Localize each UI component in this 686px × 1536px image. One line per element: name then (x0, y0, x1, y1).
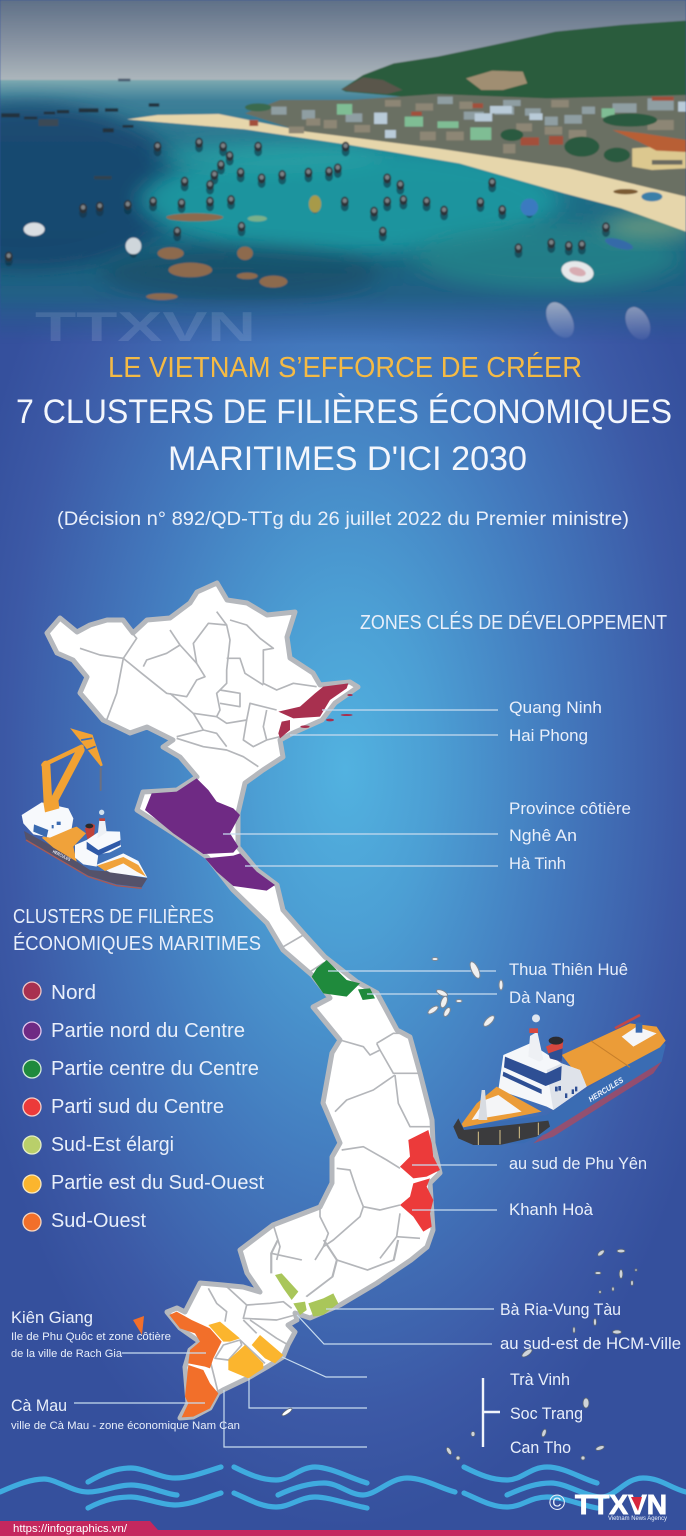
hull (24, 831, 147, 887)
label: Ca Mau: Cà Mau (11, 1396, 67, 1415)
hull name: HERCULES (587, 1075, 626, 1104)
ribbon (0, 1521, 686, 1536)
label: Soc Trang: Soc Trang (510, 1404, 583, 1423)
stern block (622, 1027, 657, 1047)
legend: Nord (23, 982, 96, 1004)
region: Nghe An and Ha Tinh (north-centre cluster) (145, 778, 275, 891)
logo tagline: Vietnam News Agency (608, 1516, 667, 1522)
province borders: Mekong delta (208, 1287, 295, 1393)
legend heading line 1: CLUSTERS DE FILIÈRES (13, 905, 214, 928)
label: Quang Ninh: Quang Ninh (509, 698, 602, 717)
legend: Partie est du Sud-Ouest: Partie est du Sud-Ouest (51, 1172, 264, 1194)
subtitle: decision reference: (Décision n° 892/QD-TTg du 26 juillet 2022 du Premier ministre) (57, 509, 629, 530)
region: Phu Quoc island (133, 1316, 144, 1335)
legend: Parti sud du Centre: Parti sud du Centre (51, 1096, 224, 1118)
label: Khanh Hoa: Khanh Hoà (509, 1200, 594, 1219)
province borders: north (80, 612, 317, 767)
label: Tra Vinh: Trà Vinh (510, 1370, 570, 1389)
label: Province cotiere: Province côtière (509, 799, 631, 818)
cargo deck (42, 827, 86, 862)
label: Phu Quoc line 1: Ile de Phu Quôc et zone côtière (11, 1331, 171, 1343)
label: Phu Quoc line 2: de la ville de Rach Gia (11, 1348, 123, 1360)
legend heading (13, 905, 261, 955)
region: southwest cluster (169, 1312, 222, 1417)
footer ribbon with URL (0, 1521, 686, 1536)
legend: Sud-Est elargi: Sud-Est élargi (51, 1134, 174, 1156)
aft block (22, 802, 73, 838)
label: southeast of HCM-Ville: au sud-est de HCM-Ville (500, 1334, 681, 1353)
islands: Paracel (427, 958, 503, 1028)
illustration: ship with crane (22, 730, 147, 888)
legend: Nord: Nord (51, 982, 96, 1004)
waves (0, 1467, 686, 1508)
label: Kien Giang: Kiên Giang (11, 1308, 93, 1327)
province labels: right column (500, 698, 681, 1457)
funnel (85, 823, 95, 839)
funnel (546, 1038, 563, 1062)
legend: Partie nord du Centre: Partie nord du Centre (51, 1020, 245, 1042)
illustration: Hercules ship (453, 1014, 666, 1145)
title: white line 2: MARITIMES D'ICI 2030 (168, 440, 527, 478)
islands: Spratly (281, 1249, 637, 1460)
bow deck (462, 1087, 542, 1127)
TTXVN logo (549, 1489, 667, 1522)
map outline (47, 583, 440, 1418)
legend (23, 982, 264, 1232)
superstructure (498, 1043, 587, 1110)
province borders: centre (273, 935, 430, 1260)
hull name: HERCULES (52, 849, 71, 862)
label: Da Nang: Dà Nang (509, 988, 575, 1007)
bow (96, 853, 147, 878)
label: Ha Tinh: Hà Tinh (509, 854, 566, 873)
region: southeast cluster (275, 1273, 338, 1317)
label: Nghe An: Nghê An (509, 826, 577, 845)
label: south of Phu Yen: au sud de Phu Yên (509, 1154, 647, 1173)
legend heading line 2: ÉCONOMIQUES MARITIMES (13, 932, 261, 955)
region: eastern southwest cluster (208, 1322, 283, 1378)
labels: Kien Giang and Ca Mau (11, 1308, 240, 1432)
URL: https://infographics.vn/ (13, 1523, 128, 1535)
watermark: TTXVN (35, 303, 256, 350)
label: Ba Ria-Vung Tau: Bà Ria-Vung Tàu (500, 1300, 621, 1319)
black fender (453, 1118, 550, 1145)
title block (16, 351, 672, 530)
label: Can Tho: Can Tho (510, 1438, 571, 1457)
logo map accent (631, 1497, 642, 1511)
logo wordmark: TTXVN (575, 1489, 667, 1520)
label: Ca Mau detail: ville de Cà Mau - zone économique Nam Can (11, 1420, 240, 1432)
region: Quang Ninh and Hai Phong (north cluster) (278, 683, 353, 738)
crane (43, 730, 102, 805)
mast (528, 1032, 543, 1062)
map of Vietnam (47, 583, 440, 1418)
blue hull (458, 1040, 666, 1143)
label: Thua Thien Hue: Thua Thiên Huê (509, 960, 628, 979)
region: Thua Thien Hue and Da Nang (centre cluster) (312, 960, 375, 1000)
photo: aerial view of fishing bay (0, 0, 686, 345)
copyright mark: © (549, 1490, 565, 1515)
title: yellow line: LE VIETNAM S’EFFORCE DE CRÉER (108, 351, 582, 384)
legend: Partie centre du Centre: Partie centre du Centre (51, 1058, 259, 1080)
legend: Sud-Ouest: Sud-Ouest (51, 1210, 146, 1232)
region: Phu Yen and Khanh Hoa (south-centre cluster) (400, 1130, 440, 1232)
mast (97, 820, 107, 838)
bridge (75, 831, 121, 867)
label: Hai Phong: Hai Phong (509, 726, 588, 745)
leader lines (74, 710, 500, 1447)
province borders: upper south (271, 1240, 398, 1297)
orange deck (562, 1023, 666, 1087)
red underside (533, 1062, 662, 1143)
